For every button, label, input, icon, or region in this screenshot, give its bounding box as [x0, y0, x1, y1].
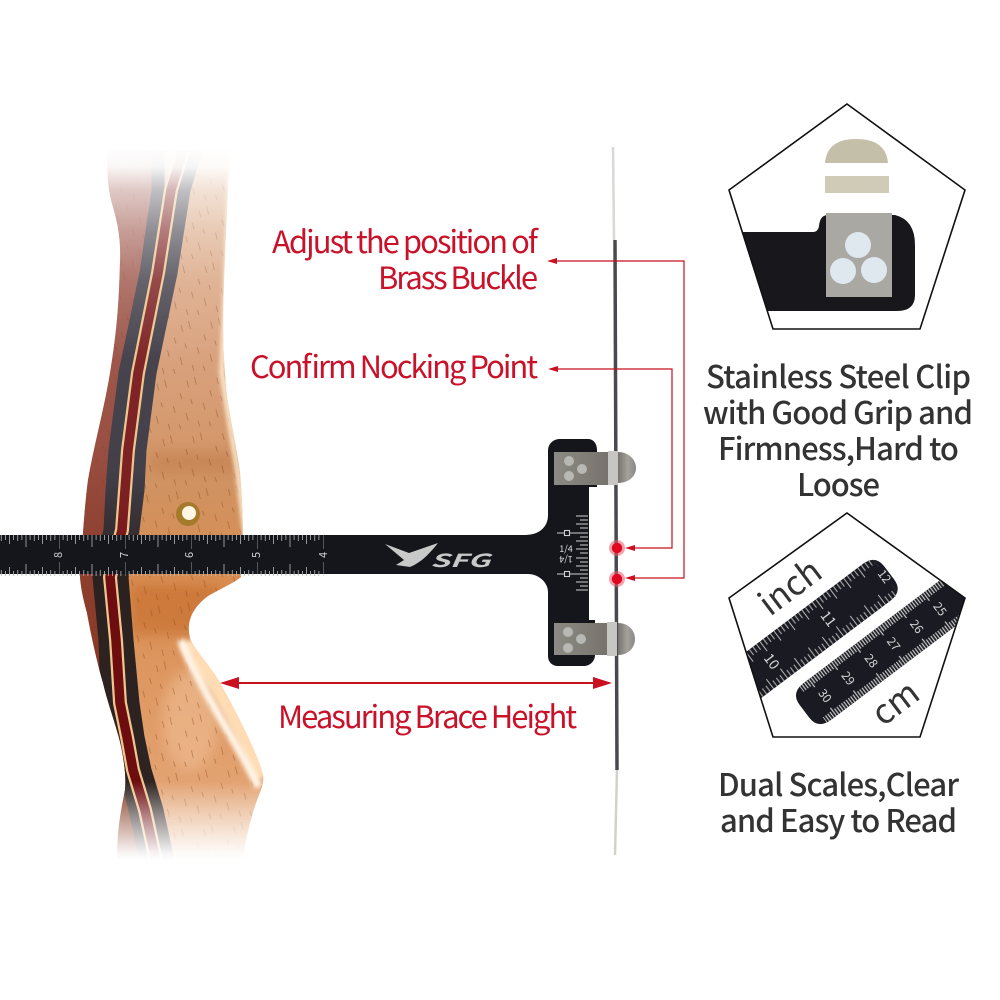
- top spring clip: [554, 451, 636, 485]
- arrow: brace height: [220, 677, 612, 689]
- inch label: inch: [747, 545, 830, 625]
- nocking point dots: [609, 540, 625, 587]
- centimetre ruler: 28: [861, 650, 882, 671]
- label: adjust brass buckle: Adjust the position of: [272, 217, 540, 262]
- bow string: [613, 147, 617, 855]
- caption: stainless clip: Stainless Steel Clip: [706, 352, 971, 397]
- one-quarter labels: 1/4: [559, 553, 573, 566]
- arrow: brass buckle: [547, 258, 684, 581]
- label: adjust brass buckle: [272, 217, 540, 298]
- centimetre ruler: 27: [883, 633, 905, 655]
- label: adjust brass buckle: Brass Buckle: [378, 253, 538, 298]
- ruler numbers: 4: [315, 552, 331, 558]
- brass bushing: [176, 502, 200, 526]
- centimetre ruler: 29: [838, 668, 859, 689]
- ruler numbers: 8: [50, 552, 66, 558]
- pentagon: dual scales detail: [728, 512, 966, 738]
- caption: dual scales: and Easy to Read: [720, 796, 957, 841]
- inch ruler: 10: [759, 649, 785, 674]
- arrow: nocking point: [548, 366, 672, 551]
- caption: stainless clip: with Good Grip and: [703, 388, 973, 433]
- centimetre ruler: 25: [929, 598, 951, 620]
- one-quarter labels: 1/4: [559, 542, 573, 555]
- caption: dual scales: [718, 760, 959, 841]
- ruler numbers: 7: [116, 552, 132, 558]
- inch ruler: [746, 558, 899, 698]
- one-quarter labels: [559, 542, 573, 566]
- label: confirm nocking point: Confirm Nocking Point: [250, 342, 538, 387]
- inch ruler: 12: [874, 566, 896, 587]
- caption: stainless clip: Firmness,Hard to: [718, 424, 959, 469]
- fine scale: [557, 516, 588, 590]
- pentagon: stainless clip detail: [720, 104, 965, 329]
- T-square ruler: [0, 439, 597, 666]
- caption: stainless clip: Loose: [797, 460, 880, 505]
- label: measuring brace height: Measuring Brace Height: [278, 692, 577, 737]
- ruler numbers: [50, 552, 331, 558]
- caption: dual scales: Dual Scales,Clear: [718, 760, 959, 805]
- ruler numbers: 6: [181, 552, 197, 558]
- SPG logo: SFG: [430, 547, 494, 573]
- centimetre ruler: [796, 580, 964, 724]
- ruler tick marks: [0, 535, 324, 576]
- ruler body: [0, 439, 597, 666]
- centimetre ruler: 26: [906, 616, 928, 637]
- ruler numbers: 5: [248, 552, 264, 558]
- SPG logo: [385, 543, 494, 573]
- bottom spring clip: [554, 622, 635, 656]
- cm label: cm: [860, 666, 928, 735]
- bow riser: [80, 162, 264, 855]
- inch ruler: 11: [816, 606, 841, 631]
- caption: stainless clip: [703, 352, 973, 505]
- centimetre ruler: 30: [814, 685, 836, 706]
